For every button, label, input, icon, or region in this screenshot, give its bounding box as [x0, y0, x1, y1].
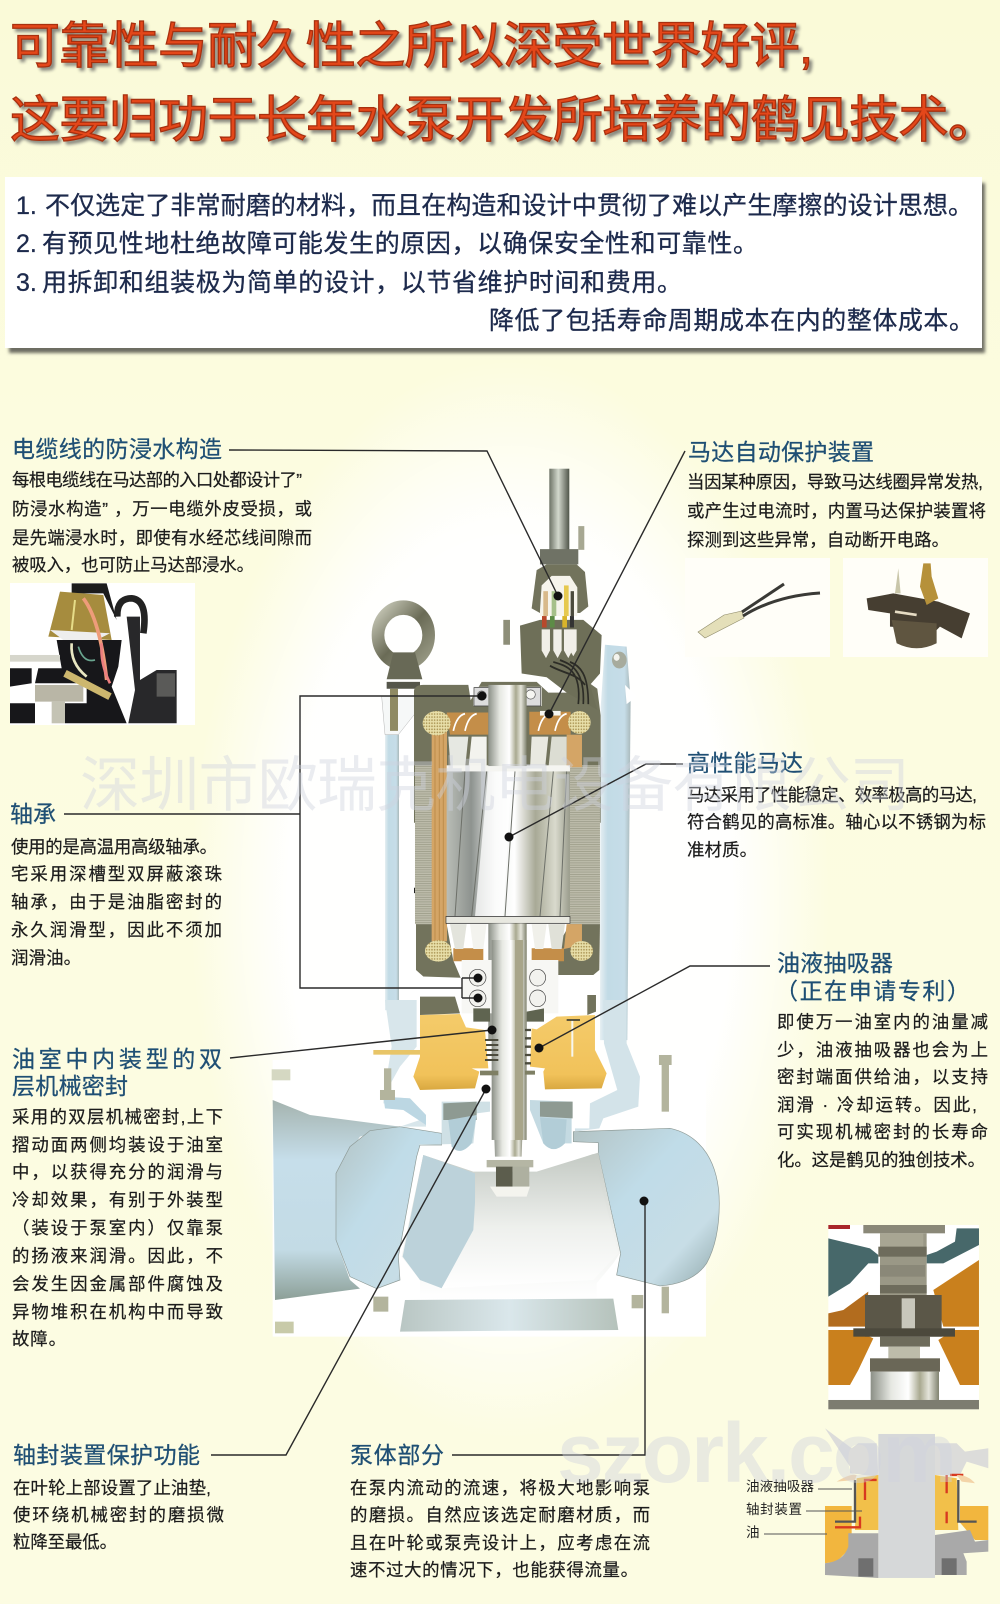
body text: 润滑油。 — [11, 948, 81, 968]
left volute — [336, 1127, 442, 1289]
body text: 冷却效果，有别于外装型 — [12, 1190, 223, 1210]
label: shaft seal device — [746, 1502, 862, 1517]
body text: 的磨损。自然应该选定耐磨材质，而 — [350, 1505, 650, 1525]
lower pump: volute, inlet and impeller — [272, 1000, 719, 1337]
bearings — [469, 969, 546, 1007]
cable — [549, 469, 569, 555]
conclusion line: 降低了包括寿命周期成本在内的整体成本。 — [489, 307, 974, 335]
dividers — [569, 1020, 575, 1057]
body text: 每根电缆线在马达部的入口处都设计了” — [12, 470, 302, 490]
callout: shaft seal protection — [13, 1084, 490, 1552]
left casing wall — [383, 1000, 426, 1127]
photo: cable entry — [10, 583, 195, 725]
shaft — [488, 685, 527, 766]
body text: 且在叶轮或泵壳设计上，应考虑在流 — [350, 1533, 650, 1553]
watermark: company name: 深圳市欧瑞克机电设备有限公司 — [80, 752, 910, 819]
body text: 当因某种原因，导致马达线圈异常发热, — [687, 472, 983, 492]
body text: 被吸入，也可防止马达部浸水。 — [12, 555, 254, 575]
label: oil suction device: 油液抽吸器 — [746, 1479, 814, 1494]
body text: 的扬液来润滑。因此，不 — [12, 1246, 223, 1266]
upper pump: cable entry and motor — [378, 469, 637, 1041]
label: oil: 油 — [746, 1525, 760, 1540]
oil chamber left — [413, 1014, 488, 1090]
body text: 少，油液抽吸器也会为上 — [777, 1040, 988, 1060]
point 1: 不仅选定了非常耐磨的材料，而且在构造和设计中贯彻了难以产生摩擦的设计思想。 — [45, 192, 973, 220]
body text: 在叶轮上部设置了止油垫, — [13, 1478, 211, 1498]
body text: 采用的双层机械密封,上下 — [12, 1107, 223, 1127]
callout: motor protector — [544, 439, 986, 718]
photo: seal close-up — [828, 1225, 979, 1409]
shaft through seal — [492, 940, 527, 1140]
body text: 在泵内流动的流速，将极大地影响泵 — [350, 1478, 650, 1498]
body text — [350, 1478, 650, 1580]
body text: 润滑 · 冷却运转。因此, — [777, 1095, 977, 1115]
heading: 轴承 — [10, 801, 56, 827]
body text: 使用的是高温用高级轴承。 — [11, 837, 217, 857]
winding loops — [453, 714, 567, 731]
oil feed pipe — [373, 1050, 420, 1055]
photo: motor protector — [843, 558, 988, 657]
motor casing — [414, 681, 601, 823]
point 1: 1. — [16, 192, 37, 220]
body text: 符合鹤见的高标准。轴心以不锈钢为标 — [687, 812, 986, 832]
body text: 即使万一油室内的油量减 — [777, 1012, 988, 1032]
body text — [11, 837, 223, 968]
body text: 或产生过电流时，内置马达保护装置将 — [687, 501, 986, 521]
body text: 防浸水构造” ，万一电缆外皮受损，或 — [12, 499, 312, 519]
body text: 马达采用了性能稳定、效率极高的马达, — [687, 785, 977, 805]
heading: 泵体部分 — [350, 1442, 444, 1468]
body text — [13, 1478, 224, 1552]
eye bolt — [378, 608, 429, 731]
body text: 可实现机械密封的长寿命 — [777, 1122, 988, 1142]
heading: 马达自动保护装置 — [688, 439, 874, 465]
watermark: site: szork.com — [557, 1406, 957, 1500]
silver bearing — [35, 685, 83, 702]
body text: 轴承，由于是油脂密封的 — [11, 892, 222, 912]
heading: 电缆线的防浸水构造 — [12, 436, 222, 462]
body text: 会发生因金属部件腐蚀及 — [12, 1274, 223, 1294]
inlet pipe — [273, 1100, 400, 1300]
body text: 速不过大的情况下，也能获得流量。 — [350, 1560, 638, 1580]
body text: 永久润滑型，因此不须加 — [11, 920, 222, 940]
body text: 是先端浸水时，即使有水经芯线间隙而 — [12, 528, 312, 548]
body text — [687, 472, 986, 550]
diagram: oil suction mechanism — [825, 1428, 988, 1578]
inlet ring — [400, 1299, 618, 1332]
label: oil suction device — [746, 1479, 852, 1494]
callout: oil suction device — [534, 950, 988, 1170]
point 2: 2. — [16, 230, 37, 258]
casing cover — [418, 1102, 490, 1145]
callout: oil chamber double mechanical seal — [12, 1026, 496, 1349]
body text: 使环绕机械密封的磨损微 — [13, 1505, 224, 1525]
cable gland cap — [532, 564, 588, 613]
hub and shaft taper — [493, 1000, 523, 1157]
oil chamber and mechanical seal — [373, 940, 607, 1140]
gold cone — [48, 592, 112, 640]
bolts — [373, 1055, 672, 1313]
coil bundles — [423, 711, 451, 735]
title: 可靠性与耐久性之所以深受世界好评, — [10, 18, 813, 74]
heading: 高性能马达 — [687, 750, 803, 776]
title — [10, 18, 998, 148]
label: shaft seal device: 轴封装置 — [746, 1502, 802, 1517]
body text: 密封端面供给油，以支持 — [777, 1067, 988, 1087]
bottom stator — [416, 924, 461, 978]
stator laminations — [415, 765, 447, 924]
oil chamber right — [530, 1015, 607, 1089]
heading: 轴封装置保护功能 — [13, 1442, 200, 1468]
junction housing — [520, 620, 602, 710]
photo: thermal protector sensor — [685, 558, 830, 657]
rotor fins bottom — [450, 924, 467, 949]
body text: 粒降至最低。 — [13, 1532, 117, 1552]
windings — [432, 731, 447, 941]
rotor fins top — [448, 737, 468, 769]
lifting ring — [117, 598, 144, 633]
body text: 宅采用深槽型双屏蔽滚珠 — [11, 864, 223, 884]
point 2: 有预见性地杜绝故障可能发生的原因，以确保安全性和可靠性。 — [42, 230, 758, 258]
body text: 化。这是鹤见的独创技术。 — [777, 1150, 985, 1170]
spring seal — [485, 1040, 498, 1060]
callout: oil chamber double mechanical seal: 层机械密封 — [12, 1073, 128, 1099]
body text — [777, 1012, 988, 1170]
terminals and leads — [542, 629, 577, 658]
top bearing — [473, 687, 542, 706]
body text: （装设于泵室内）仅靠泵 — [12, 1218, 223, 1238]
right casing wall — [575, 1000, 640, 1132]
body text: 准材质。 — [687, 840, 757, 860]
title: 这要归功于长年水泵开发所培养的鹤见技术。 — [10, 92, 998, 148]
body text — [12, 470, 312, 575]
panel: three key points — [5, 177, 985, 353]
label: oil — [746, 1525, 827, 1540]
body text — [687, 785, 986, 860]
callout: high performance motor — [504, 750, 986, 860]
heading: 油液抽吸器 — [777, 950, 893, 976]
callout: oil suction device: （正在申请专利） — [775, 978, 970, 1004]
right volute — [573, 1128, 719, 1286]
point 3: 3. — [16, 269, 37, 297]
pump cross-section diagram — [272, 469, 719, 1337]
body text: 故障。 — [12, 1329, 66, 1349]
body text: 中，以获得充分的润滑与 — [12, 1162, 223, 1182]
point 3: 用拆卸和组装极为简单的设计，以节省维护时间和费用。 — [42, 269, 682, 297]
body text: 探测到这些异常，自动断开电路。 — [687, 530, 949, 550]
wires — [83, 598, 107, 680]
body text: 摺动面两侧均装设于油室 — [12, 1135, 223, 1155]
heading: 油室中内装型的双 — [12, 1046, 222, 1072]
callout: pump body — [350, 1196, 650, 1580]
callout: cable waterproof structure — [12, 436, 562, 600]
body text — [12, 1107, 223, 1349]
callout: bearing — [10, 692, 486, 1002]
rotor body — [447, 765, 570, 772]
impeller — [402, 1153, 620, 1300]
body text: 异物堆积在机构中而导致 — [12, 1302, 223, 1322]
